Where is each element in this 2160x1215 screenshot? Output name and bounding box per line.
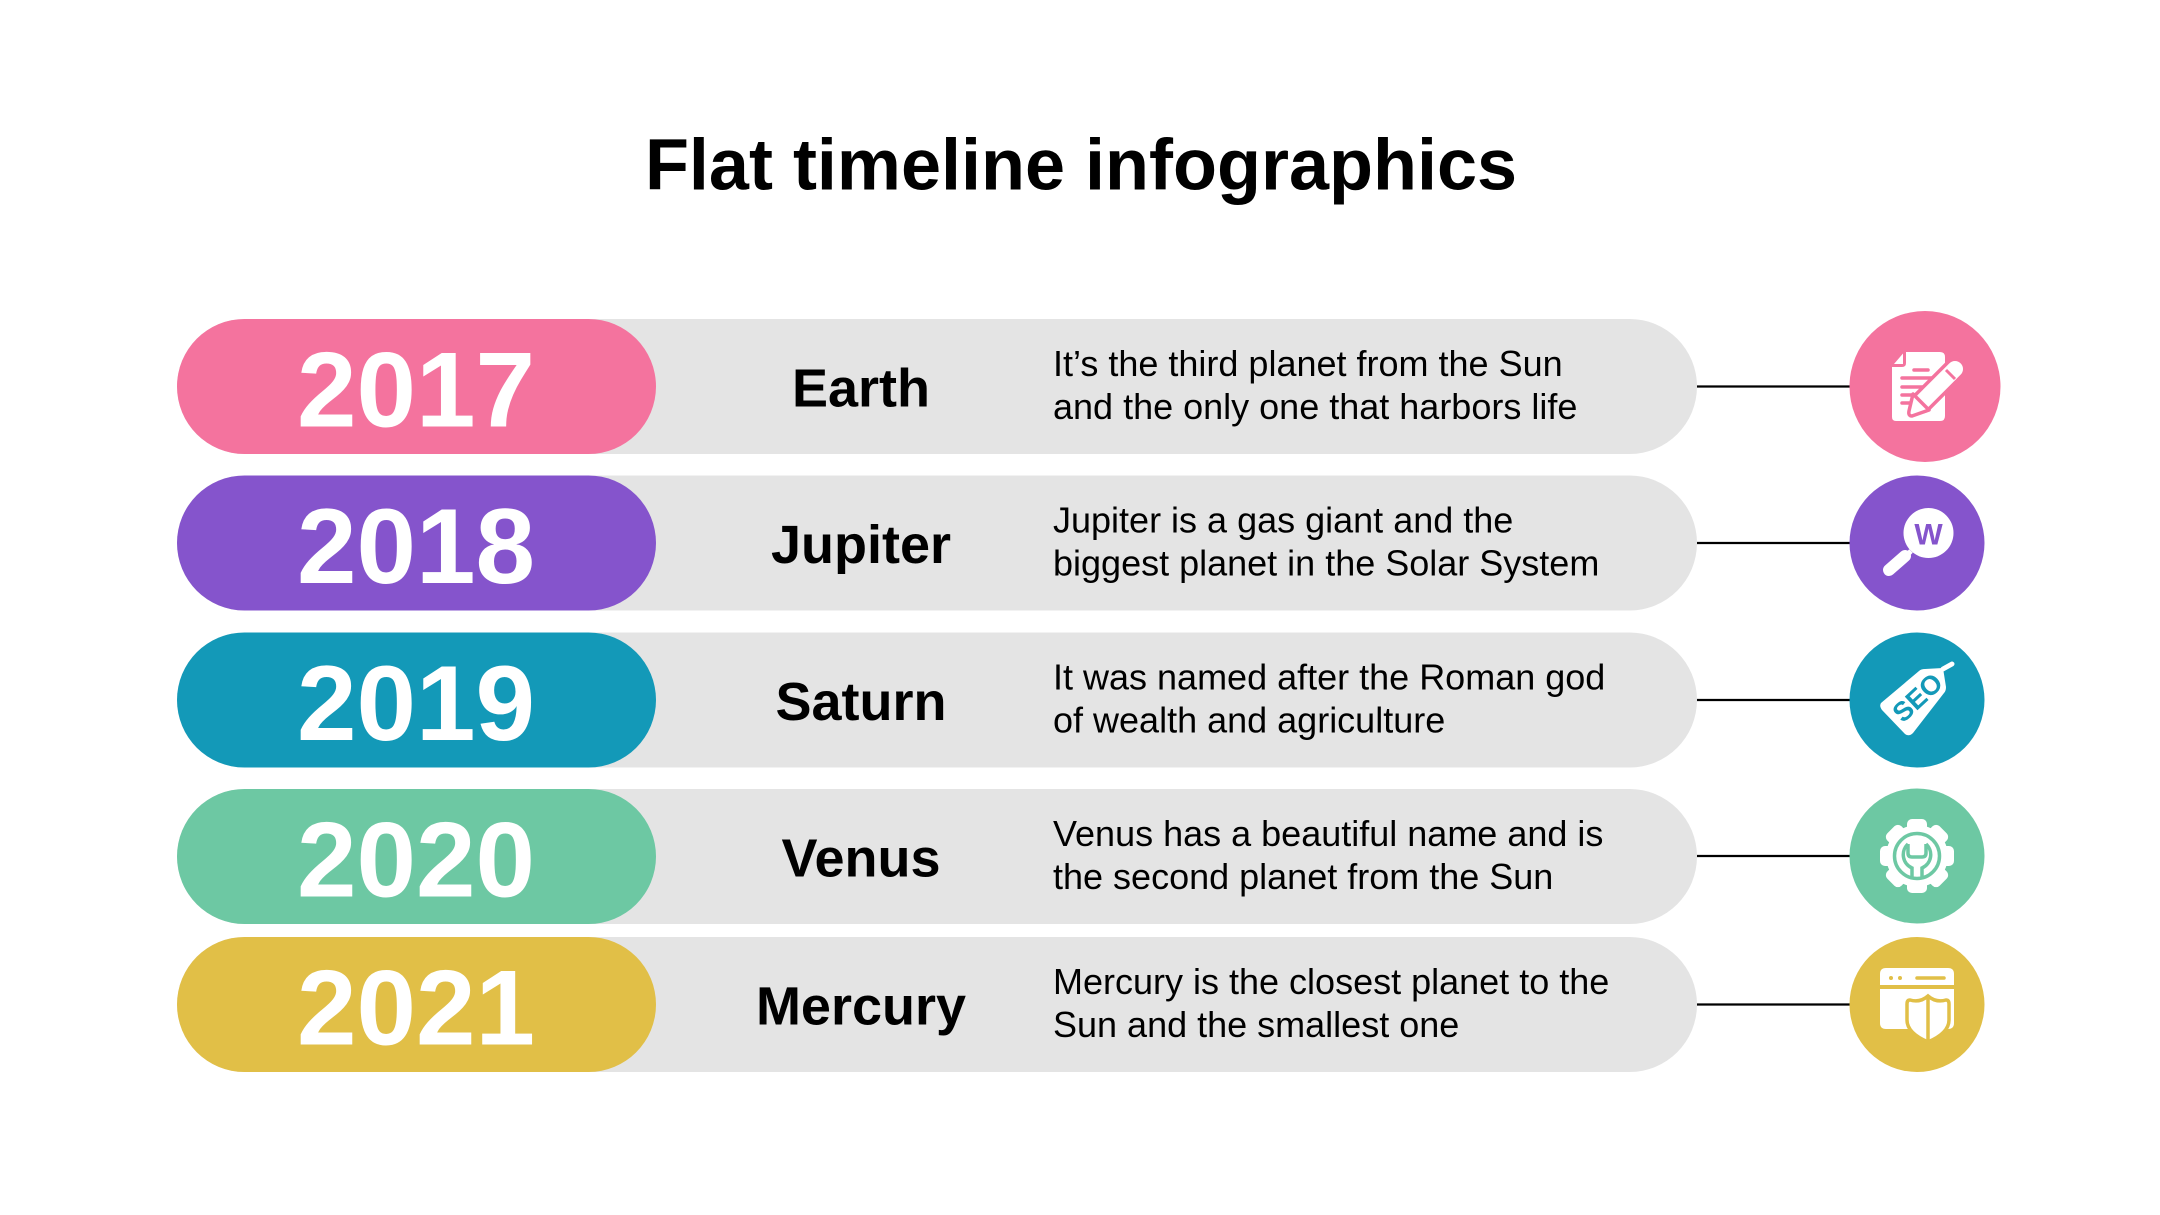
year pill: 2018: 2018	[297, 486, 535, 606]
track: 2017	[177, 319, 1697, 454]
icon: magnifier with W	[1850, 476, 1984, 610]
planet name: Venus: Venus	[781, 828, 941, 888]
description: Jupiter: Jupiter is a gas giant and the	[1053, 500, 1513, 540]
track: 2021	[177, 937, 1697, 1072]
year pill: 2019: 2019	[297, 643, 535, 763]
row: 2020 Venus	[177, 788, 1984, 924]
row: 2018 Jupiter	[177, 476, 1984, 610]
planet name: Jupiter: Jupiter	[771, 515, 951, 575]
planet name: Earth: Earth	[792, 358, 930, 418]
year pill: 2017	[177, 319, 656, 454]
icon: SEO tag	[1850, 632, 1984, 768]
icon: browser window with shield	[1850, 937, 1984, 1072]
description: Mercury: Mercury is the closest planet to the	[1053, 961, 1609, 1002]
year pill: 2018	[177, 476, 656, 610]
icon: SEO tag: SEO	[1887, 667, 1949, 728]
description: Saturn: It was named after the Roman god	[1053, 656, 1605, 698]
year pill: 2020	[177, 789, 656, 924]
icon: document and pencil	[1850, 311, 2000, 462]
description: Earth: and the only one that harbors life	[1053, 386, 1577, 427]
year pill: 2017: 2017	[297, 330, 535, 450]
title: Flat timeline infographics	[645, 126, 1517, 206]
year pill: 2020: 2020	[297, 800, 535, 920]
connector	[1697, 855, 1850, 857]
description: Venus: Venus has a beautiful name and is	[1053, 813, 1603, 854]
year pill: 2021: 2021	[297, 948, 535, 1068]
description: Jupiter: biggest planet in the Solar System	[1053, 542, 1599, 584]
row: 2021 Mercury	[177, 937, 1984, 1072]
description: Earth: It’s the third planet from the Sun	[1053, 343, 1563, 384]
icon: magnifier with W: W	[1914, 518, 1943, 552]
icon: gear and wrench	[1850, 788, 1984, 924]
year pill: 2021	[177, 937, 656, 1072]
row: 2017 Earth	[177, 311, 2000, 462]
year pill: 2019	[177, 632, 656, 768]
description: Venus: the second planet from the Sun	[1053, 856, 1553, 897]
track: 2020	[177, 789, 1697, 924]
description: Mercury: Sun and the smallest one	[1053, 1004, 1459, 1045]
description: Saturn: of wealth and agriculture	[1053, 700, 1445, 740]
track: 2018	[177, 476, 1697, 610]
connector	[1697, 385, 1850, 388]
connector	[1697, 699, 1850, 701]
connector	[1697, 542, 1850, 544]
connector	[1697, 1003, 1850, 1006]
planet name: Saturn: Saturn	[775, 672, 947, 732]
track: 2019	[177, 632, 1697, 768]
planet name: Mercury: Mercury	[756, 976, 966, 1036]
row: 2019 Saturn	[177, 632, 1984, 768]
